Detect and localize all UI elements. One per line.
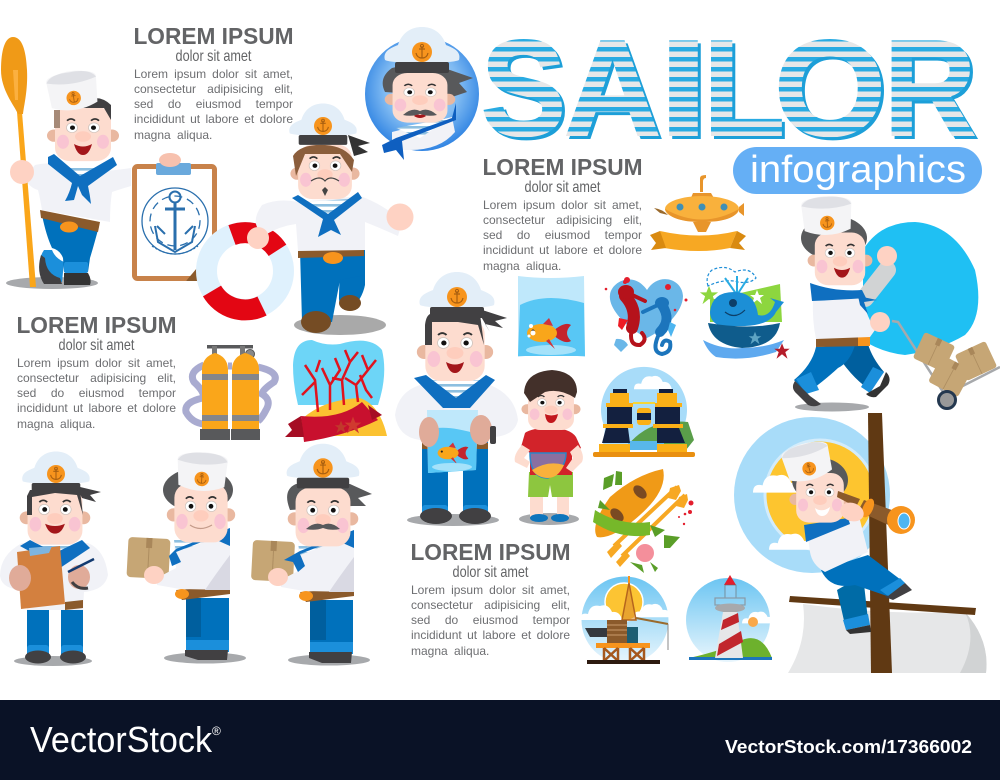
body text 1: sed do eiusmod tempor: [134, 97, 293, 111]
body text 4: magna aliqua.: [411, 644, 489, 658]
body text 2: magna aliqua.: [483, 259, 561, 273]
clipboard with anchor drawing: [134, 153, 214, 281]
footer logo: VectorStock: [30, 719, 213, 760]
subheading 3: dolor sit amet: [59, 337, 134, 354]
icon: lighthouse: [686, 575, 776, 662]
heading 1: LOREM IPSUM: [133, 23, 294, 49]
icon: seahorses in heart: [605, 277, 688, 354]
icon: diving tanks: [186, 345, 275, 440]
body text 3: magna aliqua.: [17, 417, 95, 431]
sailor pushing cart: [793, 195, 1000, 412]
title: SAILOR striped lettering: [484, 39, 978, 140]
sailor with clipboard and pen: [0, 452, 108, 666]
clipboard: [17, 546, 65, 609]
sail: [788, 596, 987, 673]
icon: anchor emblem: [142, 188, 208, 254]
icon: hand truck with boxes: [892, 321, 1000, 408]
sailor running with lifebuoy: [206, 104, 414, 335]
body text 2: Lorem ipsum dolor sit amet,: [483, 198, 642, 212]
registered mark: ®: [212, 724, 221, 738]
body text 2: consectetur adipisicing elit,: [483, 213, 642, 227]
sailor with oar: [1, 37, 131, 289]
title: SAILOR striped lettering: O: [777, 15, 889, 167]
icon: coral reef: [285, 340, 387, 442]
sailor portrait medallion: [365, 27, 479, 160]
icon: fish in bag: [518, 276, 585, 357]
body text 2: incididunt ut labore et dolore: [483, 243, 642, 257]
text block 4: [410, 539, 571, 658]
body text 3: [17, 356, 176, 431]
body text 4: consectetur adipisicing elit,: [411, 598, 570, 612]
mustached sailor carrying parcel: [251, 444, 372, 666]
icon: oar: [1, 37, 36, 287]
footer bar: [0, 700, 1000, 780]
body text 1: incididunt ut labore et dolore: [134, 112, 293, 126]
icon: submarine with ribbon: [650, 175, 746, 251]
heading 3: LOREM IPSUM: [16, 312, 177, 338]
body text 2: [483, 198, 642, 273]
icon: whale: [700, 267, 790, 359]
title: SAILOR striped lettering: S: [484, 15, 569, 167]
icon: lifebuoy: [206, 232, 284, 310]
icon: binoculars: [593, 367, 695, 457]
text block 2: [482, 154, 643, 273]
title: SAILOR striped lettering: R: [887, 15, 979, 167]
fish bag in hands: [427, 410, 478, 473]
footer image id: VectorStock.com/17366002: [725, 737, 972, 757]
text block 3: [16, 312, 177, 431]
heading 2: LOREM IPSUM: [482, 154, 643, 180]
body text 1: [134, 67, 293, 142]
body text 4: incididunt ut labore et dolore: [411, 628, 570, 642]
body text 3: consectetur adipisicing elit,: [17, 371, 176, 385]
icon: kayak with paddles: [593, 469, 694, 573]
body text 3: sed do eiusmod tempor: [17, 386, 176, 400]
icon: telescope: [837, 491, 915, 534]
subheading 4: dolor sit amet: [453, 564, 528, 581]
subheading 1: dolor sit amet: [176, 48, 251, 65]
body text 4: sed do eiusmod tempor: [411, 613, 570, 627]
subtitle pill: infographics: infographics: [750, 149, 966, 191]
title: SAILOR striped lettering: I: [662, 15, 712, 167]
body text 2: sed do eiusmod tempor: [483, 228, 642, 242]
icon: oil rig: [580, 576, 672, 664]
title: SAILOR striped lettering: A: [567, 15, 664, 167]
body text 1: consectetur adipisicing elit,: [134, 82, 293, 96]
body text 1: magna aliqua.: [134, 128, 212, 142]
body text 4: [411, 583, 570, 658]
heading 4: LOREM IPSUM: [410, 539, 571, 565]
subheading 2: dolor sit amet: [525, 179, 600, 196]
title: SAILOR striped lettering: L: [706, 15, 788, 167]
text block 1: [133, 23, 294, 142]
body text 4: Lorem ipsum dolor sit amet,: [411, 583, 570, 597]
body text 3: Lorem ipsum dolor sit amet,: [17, 356, 176, 370]
sailor carrying parcel, facing left: [126, 451, 246, 664]
body text 1: Lorem ipsum dolor sit amet,: [134, 67, 293, 81]
boy with fish bowl: [515, 370, 583, 525]
mast and sail with lookout sailor: [734, 413, 987, 673]
body text 3: incididunt ut labore et dolore: [17, 401, 176, 415]
sailor holding fish bag: [395, 272, 518, 526]
